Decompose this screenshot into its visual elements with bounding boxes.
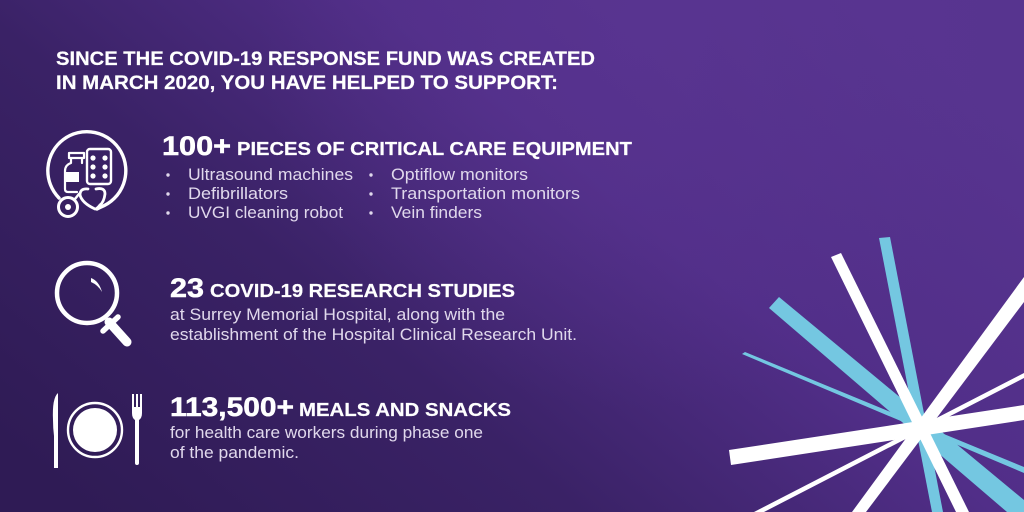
section: meals and snacks bbox=[53, 392, 511, 468]
line: 113,500+ meals and snacks: MEALS AND SNACKS bbox=[299, 399, 511, 420]
equipment list: right column bbox=[369, 165, 580, 222]
line: 113,500+ meals and snacks: 113,500+ bbox=[170, 392, 294, 422]
equipment list: right column: Vein finders bbox=[391, 203, 482, 222]
icon: knife, plate and fork bbox=[53, 393, 142, 468]
line: 23 COVID-19 research studies bbox=[170, 273, 515, 303]
line: 100+ pieces of critical care equipment: PIECES OF CRITICAL CARE EQUIPMENT bbox=[237, 138, 633, 159]
research description bbox=[170, 305, 577, 344]
research description: establishment of the Hospital Clinical Research Unit. bbox=[170, 325, 577, 344]
equipment list: right column: Transportation monitors bbox=[391, 184, 580, 203]
meals description: for health care workers during phase one bbox=[170, 423, 483, 442]
icon: magnifying glass bbox=[57, 263, 127, 342]
research description: at Surrey Memorial Hospital, along with the bbox=[170, 305, 505, 324]
equipment list: left column bbox=[166, 165, 353, 222]
equipment list: left column: Ultrasound machines bbox=[188, 165, 353, 184]
icon: medicine and stethoscope bbox=[48, 132, 126, 216]
meals description: of the pandemic. bbox=[170, 443, 299, 462]
heading: SINCE THE COVID-19 RESPONSE FUND WAS CREATED bbox=[56, 49, 595, 70]
equipment list: left column: Defibrillators bbox=[188, 184, 288, 203]
equipment list: left column: UVGI cleaning robot bbox=[188, 203, 343, 222]
line: 100+ pieces of critical care equipment bbox=[162, 131, 633, 161]
line: 100+ pieces of critical care equipment: 100+ bbox=[162, 131, 231, 161]
heading bbox=[56, 49, 595, 94]
decorative starburst bbox=[729, 237, 1024, 512]
section: critical care equipment bbox=[48, 131, 633, 222]
heading: IN MARCH 2020, YOU HAVE HELPED TO SUPPORT: bbox=[56, 73, 558, 94]
section: research studies bbox=[57, 263, 577, 344]
equipment list: right column: Optiflow monitors bbox=[391, 165, 528, 184]
meals description bbox=[170, 423, 483, 462]
line: 23 COVID-19 research studies: COVID-19 RESEARCH STUDIES bbox=[210, 280, 515, 301]
line: 113,500+ meals and snacks bbox=[170, 392, 511, 422]
line: 23 COVID-19 research studies: 23 bbox=[170, 273, 204, 303]
